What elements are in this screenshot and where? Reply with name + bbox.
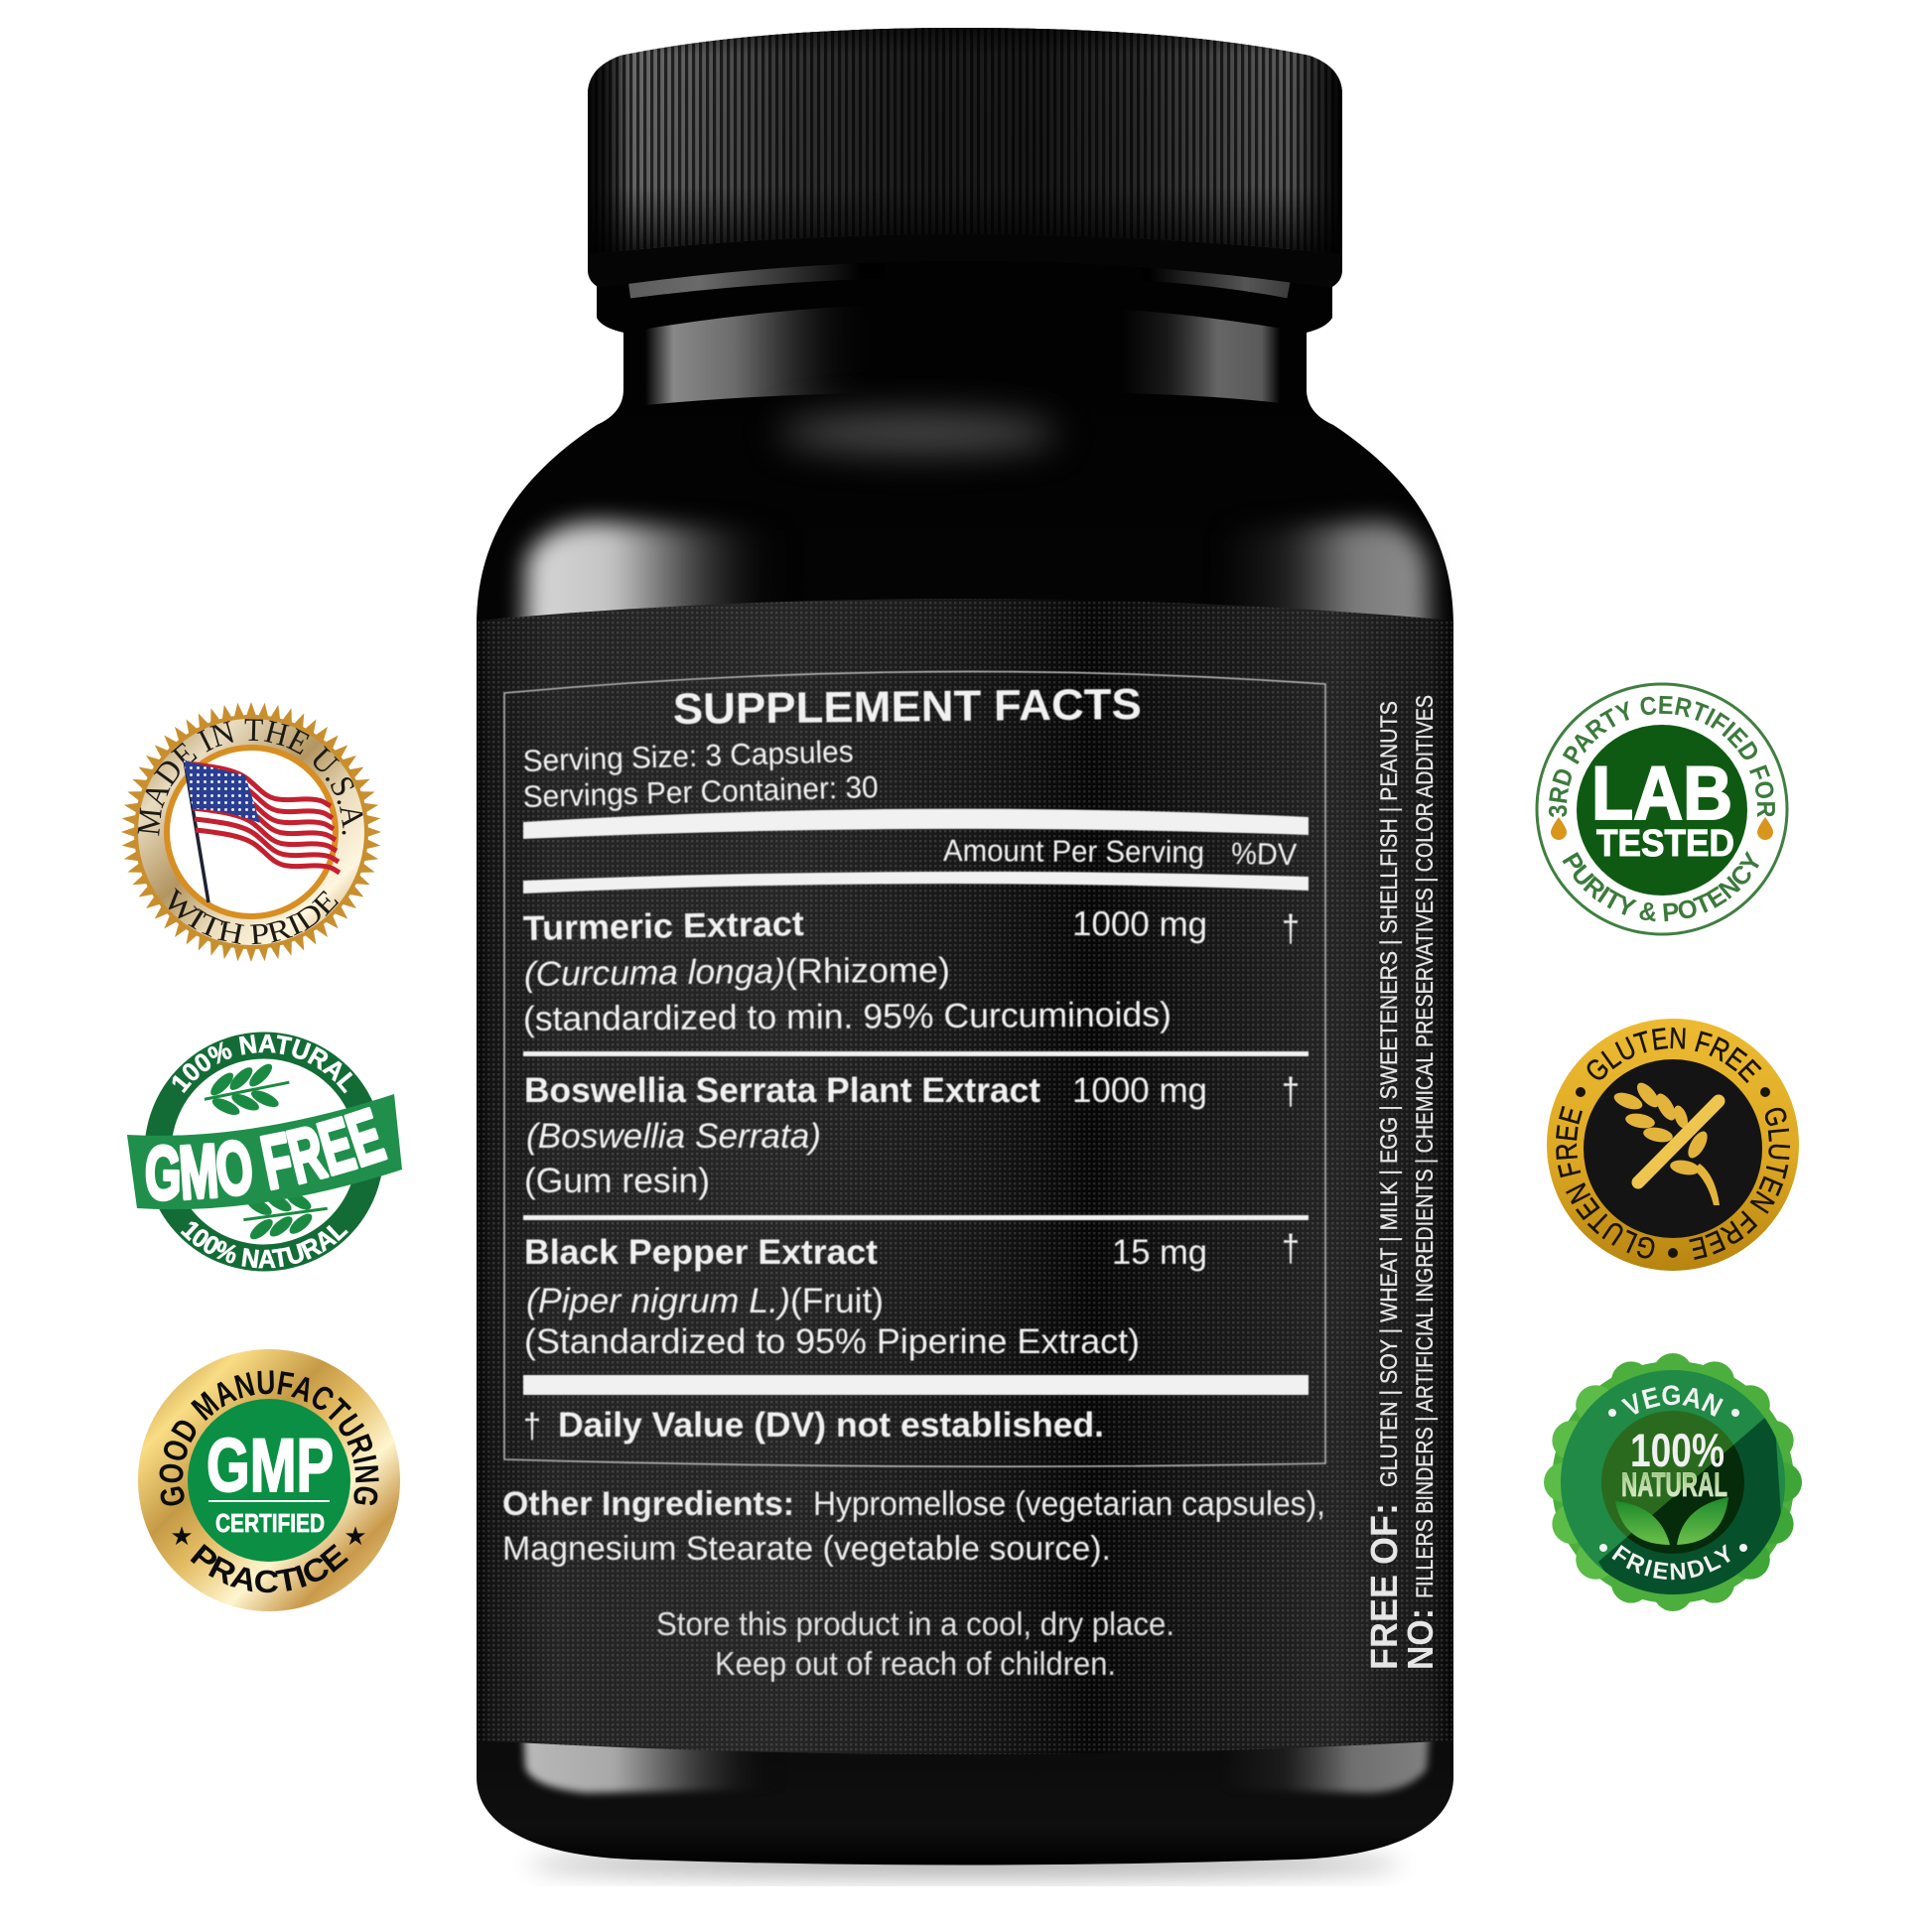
other ingredients: Hypromellose (vegetarian capsules), [813, 1485, 1325, 1523]
badge: lab tested [1535, 683, 1789, 935]
outer ring [1537, 684, 1787, 934]
inner disc [1577, 725, 1747, 896]
title: SUPPLEMENT FACTS [673, 680, 1142, 734]
seal band [138, 719, 364, 945]
bottle [477, 28, 1453, 1864]
slash [1638, 1101, 1719, 1182]
second thick bar [523, 872, 1309, 894]
column headers: %DV [1231, 836, 1298, 872]
bottom arc text: PURITY & POTENCY [1563, 851, 1759, 921]
row: boswellia: Boswellia Serrata Plant Extract [524, 1071, 1040, 1110]
seal rim [134, 715, 368, 949]
cap ribs [588, 28, 1342, 254]
ring band right [1142, 272, 1289, 290]
badge: gluten free [1547, 1019, 1799, 1271]
lower reflection left [523, 1727, 794, 1793]
column headers: Amount Per Serving [943, 833, 1204, 870]
badge: gmo free [127, 1033, 402, 1271]
other ingredients [502, 1485, 1325, 1568]
free of line: GLUTEN | SOY | WHEAT | MILK | EGG | SWEETENERS | SHELLFISH | PEANUTS [1376, 701, 1403, 1487]
other ingredients: Other Ingredients: [502, 1485, 794, 1523]
supplement facts panel [504, 671, 1325, 1466]
top arc text: 3RD PARTY CERTIFIED FOR [1549, 695, 1775, 817]
row: black pepper: (Standardized to 95% Piperine Extract) [524, 1322, 1140, 1361]
gmp wordmark: GMP [207, 1424, 334, 1508]
gmp rule [208, 1500, 330, 1502]
arc texts: GLUTEN FREE [1689, 1108, 1791, 1260]
row: black pepper: (Fruit) [790, 1282, 884, 1320]
serving info: Servings Per Container: 30 [522, 769, 879, 814]
arc texts: GLUTEN FREE [1556, 1106, 1654, 1259]
row: turmeric: 1000 mg [1072, 904, 1207, 944]
bottom thick bar [523, 1375, 1309, 1395]
disc dots [1599, 1409, 1747, 1552]
arc texts [1556, 1027, 1791, 1260]
bottle cap [588, 28, 1342, 288]
shoulder highlight [779, 413, 1057, 453]
row: boswellia [524, 1071, 1300, 1200]
row: turmeric: Turmeric Extract [522, 904, 804, 948]
green center [188, 1399, 350, 1562]
cap shell [588, 28, 1342, 288]
row: turmeric: (Rhizome) [785, 951, 950, 991]
label [477, 599, 1453, 1754]
left drop [1551, 817, 1567, 840]
free of line [1364, 701, 1406, 1670]
seal teeth [106, 685, 396, 979]
row: boswellia: † [1282, 1071, 1300, 1113]
ring top text: 100% NATURAL [173, 1035, 353, 1094]
star right: ★ [344, 1522, 367, 1552]
shoulder reflection right [1216, 521, 1430, 655]
row: boswellia: (Boswellia Serrata) [526, 1117, 821, 1156]
ring [158, 1045, 370, 1258]
storage note: Keep out of reach of children. [715, 1645, 1116, 1682]
shoulder reflection left [524, 521, 794, 655]
ribbon text: GMO FREE [145, 1106, 388, 1201]
daily value footnote: Daily Value (DV) not established. [558, 1406, 1104, 1445]
serving info [522, 734, 879, 814]
row: turmeric: † [1282, 908, 1300, 950]
badge: gmp certified [138, 1349, 400, 1611]
natural wordmark: NATURAL [1621, 1466, 1727, 1504]
inner disc [1601, 1411, 1744, 1554]
badge: made in the usa [121, 702, 381, 962]
ring band left [629, 270, 884, 290]
disc [1559, 1368, 1787, 1608]
neck highlight right [1122, 298, 1281, 403]
divider 2 [523, 1215, 1309, 1220]
row: black pepper: 15 mg [1112, 1233, 1207, 1272]
no line: NO: [1400, 1608, 1441, 1670]
bottom sprig [241, 1185, 330, 1244]
arc texts: GLUTEN FREE [1587, 1027, 1761, 1084]
neck ring [597, 248, 1332, 333]
storage note: Store this product in a cool, dry place. [656, 1605, 1174, 1642]
vertical free-of text [1364, 695, 1441, 1670]
daily value footnote: † [523, 1407, 541, 1446]
ring bottom text: 100% NATURAL [181, 1221, 348, 1269]
no line [1400, 695, 1441, 1670]
seal bottom text: WITH PRIDE [169, 888, 339, 945]
vegan text: VEGAN [1620, 1385, 1724, 1417]
neck highlight left [645, 300, 879, 405]
label background [477, 599, 1453, 1754]
ring dots [1576, 1087, 1770, 1258]
gold ring [1547, 1019, 1799, 1271]
row: turmeric: (Curcuma longa) [524, 952, 785, 994]
gold ring bottom text: PRACTICE [191, 1543, 349, 1592]
ribbon [127, 1094, 402, 1209]
100% wordmark: 100% [1630, 1424, 1725, 1476]
bottle shadow [528, 1853, 1402, 1876]
black center [1584, 1059, 1762, 1238]
seal top text: MADE IN THE U.S.A. [137, 719, 363, 836]
no line: FILLERS BINDERS | ARTIFICIAL INGREDIENTS | CHEMICAL PRESERVATIVES | COLOR ADDITIVES [1412, 695, 1439, 1598]
wheat icon [1612, 1079, 1720, 1205]
row: turmeric: (standardized to min. 95% Curcuminoids) [523, 995, 1172, 1038]
leaves icon [1615, 1497, 1728, 1545]
gold disc [138, 1349, 400, 1611]
gold ring top text: GOOD MANUFACTURING [159, 1370, 379, 1505]
free of line: FREE OF: [1364, 1503, 1406, 1670]
bottle body [477, 298, 1453, 1864]
row: black pepper: † [1282, 1228, 1300, 1270]
tested wordmark: TESTED [1596, 823, 1734, 865]
top thick bar [523, 809, 1309, 839]
friendly text: FRIENDLY [1612, 1544, 1730, 1581]
divider 1 [523, 1051, 1309, 1056]
flag [184, 760, 340, 902]
row: black pepper: (Piper nigrum L.) [526, 1282, 790, 1320]
badge: vegan friendly [1544, 1353, 1802, 1611]
row: boswellia: 1000 mg [1072, 1071, 1207, 1110]
panel border [504, 671, 1325, 1466]
row: black pepper [524, 1228, 1300, 1361]
star left: ★ [170, 1522, 194, 1552]
scalloped edge [1544, 1353, 1802, 1611]
other ingredients: Magnesium Stearate (vegetable source). [502, 1530, 1111, 1568]
top sprig [200, 1057, 294, 1123]
lower reflection right [1216, 1727, 1430, 1793]
label texture [477, 599, 1453, 1754]
certified text: CERTIFIED [215, 1508, 325, 1538]
serving info: Serving Size: 3 Capsules [522, 734, 854, 778]
right drop [1757, 817, 1773, 840]
seal center [167, 748, 336, 916]
row: boswellia: (Gum resin) [524, 1162, 710, 1200]
row: black pepper: Black Pepper Extract [524, 1233, 878, 1272]
storage note [656, 1605, 1174, 1682]
row: turmeric [522, 904, 1300, 1038]
lab wordmark: LAB [1591, 752, 1732, 836]
